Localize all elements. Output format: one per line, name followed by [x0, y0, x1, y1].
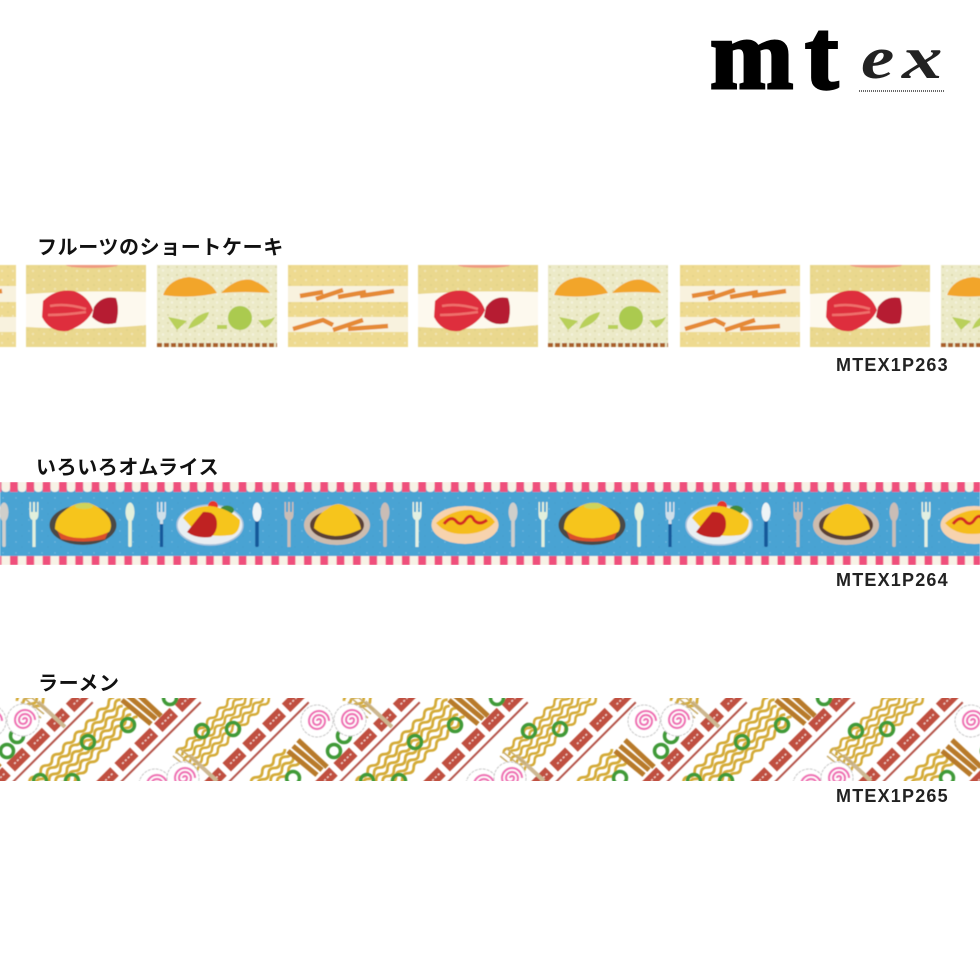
- logo: mt ex: m: [710, 0, 793, 110]
- product code 263: MTEX1P263: [836, 355, 949, 375]
- logo: mt ex: [710, 0, 945, 110]
- logo: mt ex: t: [805, 0, 838, 110]
- tape: omelette rice: [0, 482, 980, 565]
- logo: mt ex: x: [901, 25, 943, 91]
- product code 264: MTEX1P264: [836, 570, 949, 590]
- heading: fruit shortcake: フルーツのショートケーキ: [37, 236, 284, 259]
- heading: ramen: ラーメン: [38, 673, 120, 695]
- logo: mt ex: e: [861, 24, 894, 91]
- product code 265: MTEX1P265: [836, 786, 949, 806]
- heading: assorted omelette rice: いろいろオムライス: [36, 457, 219, 479]
- tape: ramen: [0, 698, 980, 781]
- tape: fruit shortcake: [0, 262, 980, 347]
